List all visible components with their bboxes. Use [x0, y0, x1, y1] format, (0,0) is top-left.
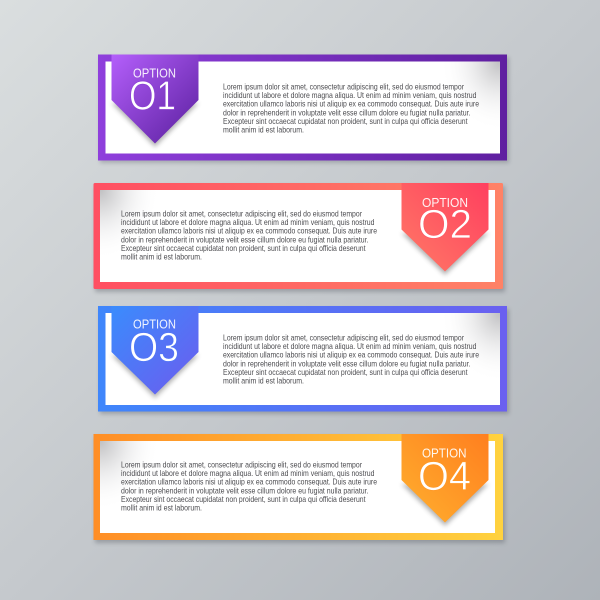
text block: option 03: Excepteur sint occaecat cupidatat non proident, sunt in culpa qui officia deserunt	[223, 367, 468, 377]
text block: option 04: incididunt ut labore et dolore magna aliqua. Ut enim ad minim veniam, quis nostrud	[121, 468, 375, 478]
text block: option 02: Lorem ipsum dolor sit amet, consectetur adipiscing elit, sed do eiusmod tempor	[121, 208, 362, 218]
panel: option 03	[98, 306, 509, 414]
text block: option 01: Excepteur sint occaecat cupidatat non proident, sunt in culpa qui officia deserunt	[223, 116, 468, 126]
text block: option 04	[121, 460, 377, 512]
text block: option 01: incididunt ut labore et dolore magna aliqua. Ut enim ad minim veniam, quis nostrud	[223, 90, 477, 100]
text block: option 02: dolor in reprehenderit in voluptate velit esse cillum dolore eu fugiat nulla pariatur.	[121, 234, 368, 244]
text block: option 02: incididunt ut labore et dolore magna aliqua. Ut enim ad minim veniam, quis nostrud	[121, 217, 375, 227]
text block: option 02	[121, 208, 377, 262]
text block: option 01: dolor in reprehenderit in voluptate velit esse cillum dolore eu fugiat nulla pariatur.	[223, 107, 470, 117]
text block: option 01: exercitation ullamco laboris nisi ut aliquip ex ea commodo consequat. Duis aute irure	[223, 99, 479, 109]
text block: option 04: Excepteur sint occaecat cupidatat non proident, sunt in culpa qui officia deserunt	[121, 494, 366, 504]
text block: option 01: mollit anim id est laborum.	[223, 124, 304, 134]
text block: option 03: exercitation ullamco laboris nisi ut aliquip ex ea commodo consequat. Duis aute irure	[223, 350, 479, 360]
text block: option 04: dolor in reprehenderit in voluptate velit esse cillum dolore eu fugiat nulla pariatur.	[121, 485, 368, 495]
ribbon: option 02: OPTION	[422, 196, 468, 210]
text block: option 04: mollit anim id est laborum.	[121, 502, 202, 512]
text block: option 03	[223, 332, 479, 386]
panel: option 01	[98, 54, 509, 163]
ribbon: option 01: OPTION	[133, 66, 176, 80]
panel: option 04	[94, 434, 505, 543]
ribbon: option 04	[402, 434, 488, 522]
ribbon: option 04: OPTION	[422, 446, 466, 460]
ribbon: option 03: OPTION	[133, 318, 176, 332]
text block: option 03: dolor in reprehenderit in voluptate velit esse cillum dolore eu fugiat nulla pariatur.	[223, 358, 470, 368]
text block: option 04: exercitation ullamco laboris nisi ut aliquip ex ea commodo consequat. Duis aute irure	[121, 477, 377, 487]
ribbon: option 03	[112, 306, 198, 394]
panel: option 02	[94, 183, 505, 292]
text block: option 04: Lorem ipsum dolor sit amet, consectetur adipiscing elit, sed do eiusmod tempor	[121, 460, 362, 470]
text block: option 01	[223, 82, 479, 134]
ribbon: option 02: O2	[418, 201, 472, 247]
text block: option 01: Lorem ipsum dolor sit amet, consectetur adipiscing elit, sed do eiusmod tempor	[223, 82, 464, 92]
text block: option 02: exercitation ullamco laboris nisi ut aliquip ex ea commodo consequat. Duis aute irure	[121, 226, 377, 236]
ribbon: option 01: O1	[129, 72, 176, 118]
text block: option 02: mollit anim id est laborum.	[121, 252, 202, 262]
ribbon: option 03: O3	[129, 324, 179, 370]
text block: option 02: Excepteur sint occaecat cupidatat non proident, sunt in culpa qui officia deserunt	[121, 243, 366, 253]
text block: option 03: Lorem ipsum dolor sit amet, consectetur adipiscing elit, sed do eiusmod tempor	[223, 332, 464, 342]
ribbon: option 04: O4	[418, 453, 471, 499]
text block: option 03: incididunt ut labore et dolore magna aliqua. Ut enim ad minim veniam, quis nostrud	[223, 341, 477, 351]
text block: option 03: mollit anim id est laborum.	[223, 376, 304, 386]
ribbon: option 02	[402, 183, 488, 272]
ribbon: option 01	[112, 54, 198, 144]
